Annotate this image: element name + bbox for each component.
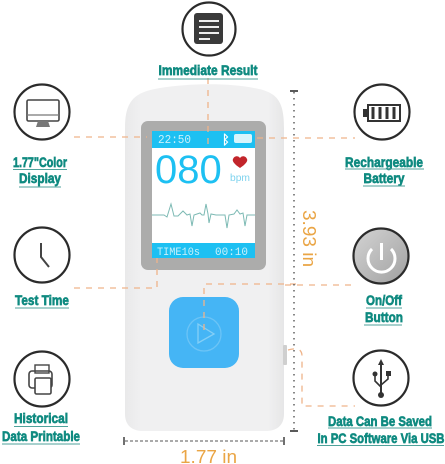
- screen top bar: 22:50: [158, 133, 191, 147]
- feature: test time: Test Time: [15, 293, 69, 308]
- side button: [283, 345, 287, 365]
- feature: color display: Display: [19, 171, 61, 186]
- device body: [125, 84, 287, 431]
- heart icon: [233, 156, 247, 168]
- feature: test time: [14, 228, 70, 308]
- feature: rechargeable battery: Rechargeable: [345, 155, 423, 170]
- feature: on/off button: [354, 228, 408, 325]
- screen bottom bar: [152, 243, 255, 259]
- feature: usb data saving: [317, 350, 445, 446]
- feature: rechargeable battery: Battery: [364, 171, 405, 186]
- screen top bar: [152, 131, 255, 148]
- feature: printable: Historical: [14, 411, 68, 426]
- height dimension line: [290, 91, 298, 431]
- screen bottom bar: TIME10s: [157, 247, 200, 259]
- feature: immediate result: Immediate Result: [158, 63, 258, 78]
- width dimension line: [124, 437, 284, 445]
- feature: color display: 1.77"Color: [13, 155, 68, 170]
- feature: rechargeable battery: [345, 84, 424, 186]
- feature: printable: [2, 352, 80, 444]
- heart rate reading: 080: [155, 148, 222, 192]
- height label: 3.93 in: [299, 210, 320, 267]
- feature: color display: [13, 84, 70, 187]
- screen bottom bar: 00:10: [215, 247, 248, 259]
- feature: on/off button: Button: [365, 310, 403, 325]
- leader lines: [74, 78, 355, 406]
- device screen: [141, 121, 266, 270]
- feature: on/off button: On/Off: [366, 293, 402, 308]
- ECG trace: [152, 204, 255, 228]
- bpm unit: bpm: [230, 173, 250, 184]
- play button: [169, 297, 239, 368]
- feature: printable: Data Printable: [2, 429, 80, 444]
- screen top bar: ᛒ: [222, 132, 230, 147]
- feature: immediate result: [158, 2, 258, 79]
